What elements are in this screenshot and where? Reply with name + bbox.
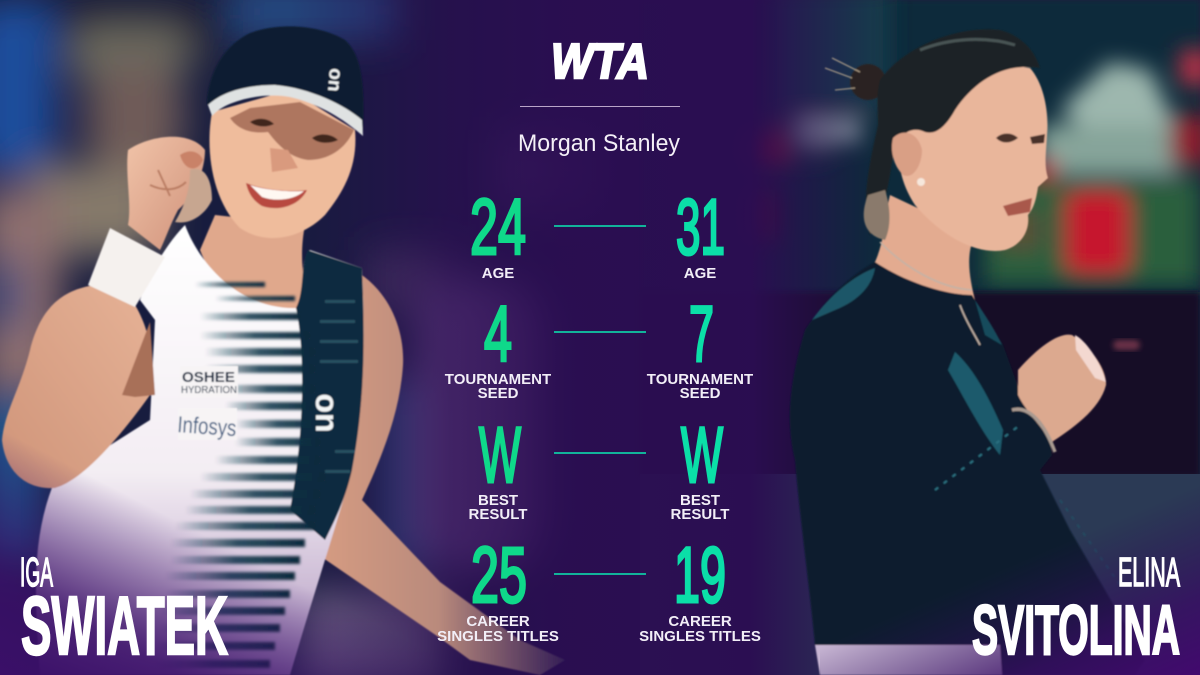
- stat row: tournament seed: TOURNAMENT: [647, 371, 753, 388]
- stat row: tournament seed: [445, 289, 753, 402]
- stat row: career singles titles: 25: [471, 530, 527, 619]
- eye shadow band: [230, 102, 354, 160]
- stat row: age: 24: [470, 182, 526, 271]
- stat row: career singles titles: CAREER: [668, 613, 732, 630]
- stat row: best result: W: [681, 410, 723, 499]
- right arm and shoulder: [306, 268, 565, 675]
- name: Elina Svitolina: [972, 549, 1180, 669]
- stat row: tournament seed: SEED: [478, 385, 519, 402]
- sponsor: Morgan Stanley: Morgan Stanley: [518, 130, 680, 157]
- stat row: career singles titles: CAREER: [466, 613, 530, 630]
- stat row: career singles titles: SINGLES TITLES: [639, 628, 761, 645]
- tank top body: [36, 225, 364, 675]
- ponytail: [175, 169, 212, 223]
- sponsor: Infosys: Infosys: [177, 411, 237, 441]
- hair bun: [825, 58, 886, 100]
- ear: [892, 133, 922, 176]
- sponsor: Oshee: OSHEE: [182, 369, 235, 386]
- bracelet: [1012, 409, 1055, 452]
- face: [209, 90, 355, 238]
- stat row: age: AGE: [482, 265, 514, 282]
- stat row: best result: RESULT: [469, 506, 527, 523]
- navy side panel: [290, 250, 364, 540]
- stat row: best result: BEST: [478, 492, 518, 509]
- sleeve seam: [935, 425, 1020, 490]
- right photo backdrop: [640, 0, 1200, 296]
- lips: [1003, 198, 1032, 216]
- sponsor: Oshee: [180, 366, 238, 397]
- purple fade bottom right: [820, 440, 1200, 675]
- necklaces: [880, 242, 980, 345]
- shorts: [815, 645, 1002, 675]
- neck: [875, 195, 975, 310]
- stat row: best result: W: [479, 410, 521, 499]
- panel ticks: [320, 300, 358, 473]
- stat row: career singles titles: 19: [674, 530, 726, 619]
- stat row: age: AGE: [684, 265, 716, 282]
- stat row: tournament seed: SEED: [680, 385, 721, 402]
- nose and smile: [270, 148, 298, 172]
- fist and forearm: [127, 137, 205, 250]
- stat row: tournament seed: TOURNAMENT: [445, 371, 551, 388]
- hair: [866, 29, 1040, 235]
- sleeve shirt body: [790, 262, 1145, 675]
- stat row: tournament seed: 4: [484, 289, 512, 378]
- WTA logo: WTA: [551, 35, 649, 89]
- name: Iga Swiatek: [20, 549, 228, 672]
- player photo: Elina Svitolina: [790, 29, 1145, 675]
- stat row: age: 31: [676, 182, 725, 271]
- stat row: best result: BEST: [680, 492, 720, 509]
- cap crown: [207, 26, 364, 132]
- stat row: career singles titles: SINGLES TITLES: [437, 628, 559, 645]
- head skin: [898, 67, 1048, 251]
- eyes: [996, 134, 1045, 144]
- shirt logo: on: [309, 393, 345, 433]
- name: Iga Swiatek: SWIATEK: [21, 579, 228, 672]
- player photo: Iga Swiatek: [2, 26, 565, 675]
- name: Iga Swiatek: IGA: [20, 549, 53, 595]
- stat row: tournament seed: 7: [689, 289, 714, 378]
- stat row: career singles titles: [437, 530, 761, 645]
- cap logo: on: [323, 67, 346, 92]
- wristband: [88, 228, 165, 307]
- cap visor: [208, 85, 363, 136]
- stat row: age: [470, 182, 725, 282]
- sponsor: Oshee: HYDRATION: [181, 384, 237, 396]
- stat row: best result: RESULT: [671, 506, 729, 523]
- left arm: [2, 285, 152, 488]
- eyes: [250, 119, 338, 143]
- sublimated stripes: [155, 282, 325, 668]
- fist: [1018, 335, 1106, 442]
- loose hair at nape: [864, 190, 890, 240]
- stat row: best result: [469, 410, 729, 523]
- divider: [520, 106, 680, 107]
- neck: [200, 215, 310, 320]
- purple fade bottom left: [0, 430, 430, 675]
- center purple column overlay: [290, 0, 880, 675]
- shirt highlights: [812, 268, 875, 320]
